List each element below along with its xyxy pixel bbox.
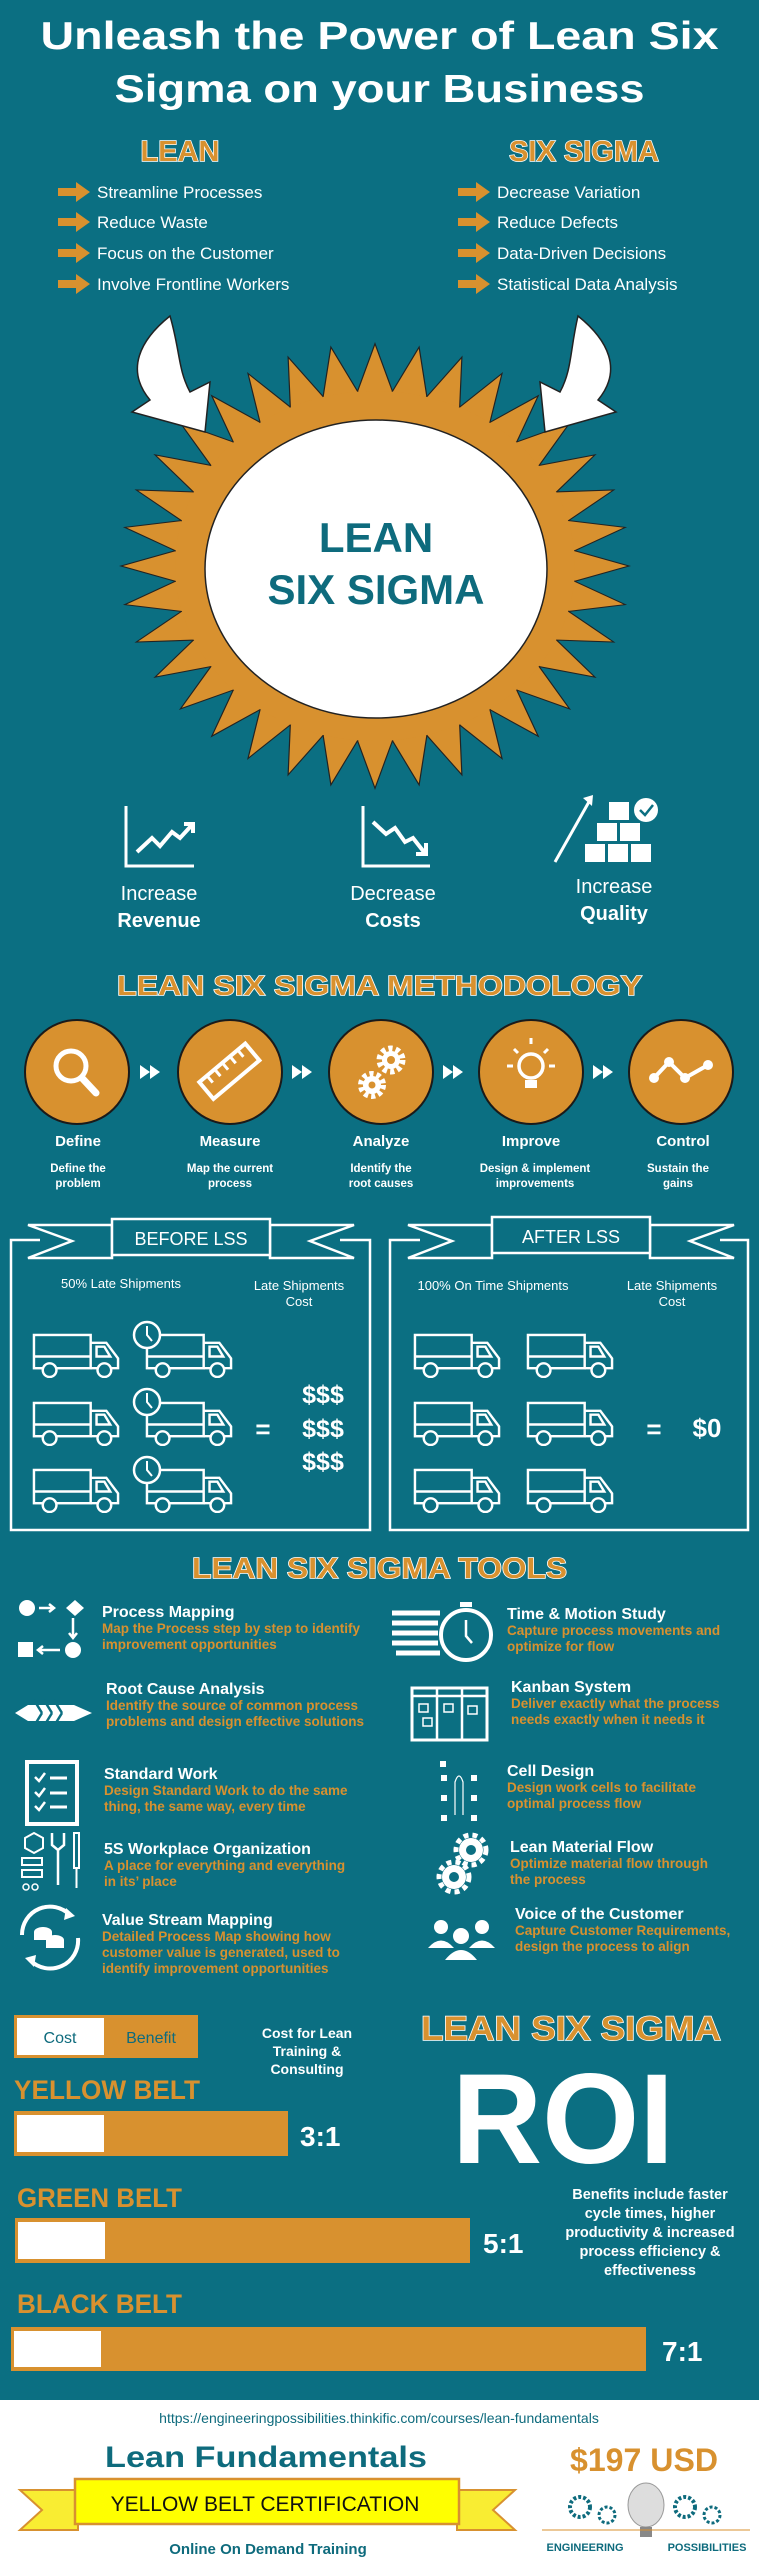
tool: voice of customer: Voice of the Customer bbox=[515, 1906, 684, 1923]
title bbox=[40, 15, 719, 111]
panel: after LSS: = bbox=[646, 1414, 662, 1444]
tool: root cause: problems and design effective solutions bbox=[106, 1714, 364, 1729]
tool: kanban: Kanban System bbox=[511, 1679, 631, 1696]
list: six sigma bullets bbox=[458, 182, 677, 294]
legend: cost / benefit: Cost bbox=[44, 2030, 77, 2047]
sunburst: lean six sigma bbox=[121, 344, 629, 788]
tool: voice of customer: design the process to align bbox=[515, 1939, 690, 1954]
tool: time and motion: Capture process movements and bbox=[507, 1623, 720, 1638]
bar: yellow belt: 3:1 bbox=[300, 2121, 340, 2152]
heading: methodology: LEAN SIX SIGMA METHODOLOGY bbox=[117, 970, 642, 1001]
tool: lean material flow: Lean Material Flow bbox=[510, 1839, 654, 1856]
title: Unleash the Power of Lean Six bbox=[40, 15, 719, 58]
heading: tools: LEAN SIX SIGMA TOOLS bbox=[192, 1553, 567, 1585]
step: improve: improvements bbox=[496, 1178, 574, 1190]
tool: root cause: Root Cause Analysis bbox=[106, 1681, 265, 1698]
panel: before LSS: Cost bbox=[286, 1294, 313, 1309]
tool: process mapping: Process Mapping bbox=[102, 1604, 234, 1621]
ribbon: before LSS: BEFORE LSS bbox=[134, 1229, 248, 1249]
bar: green belt: 5:1 bbox=[483, 2228, 523, 2259]
label: increase quality: Quality bbox=[580, 903, 649, 925]
step: measure bbox=[178, 1020, 282, 1190]
tool: standard work bbox=[27, 1762, 348, 1824]
tool: voice of customer: Capture Customer Requirements, bbox=[515, 1923, 730, 1938]
arrow: left curved bbox=[132, 316, 210, 432]
sunburst: lean six sigma: LEAN bbox=[319, 514, 433, 561]
step: define: Define bbox=[55, 1133, 101, 1150]
tool: cell design: Cell Design bbox=[507, 1763, 594, 1780]
tool: kanban: Deliver exactly what the process bbox=[511, 1696, 720, 1711]
tool: lean material flow: Optimize material flow through bbox=[510, 1856, 708, 1871]
arrow bbox=[443, 1065, 463, 1079]
tool: value stream mapping: identify improvement opportunities bbox=[102, 1961, 329, 1976]
arrow bbox=[292, 1065, 312, 1079]
label: decrease costs bbox=[350, 883, 436, 932]
icon: quality boxes bbox=[555, 795, 658, 862]
list: six sigma bullets: Statistical Data Analysis bbox=[497, 275, 677, 294]
step: control: Control bbox=[656, 1133, 710, 1150]
panel: after LSS: Late Shipments bbox=[627, 1278, 718, 1293]
bar: black belt: 7:1 bbox=[662, 2336, 702, 2367]
panel: before LSS bbox=[11, 1219, 370, 1530]
panel: after LSS bbox=[390, 1217, 748, 1530]
arrow: right curved bbox=[540, 316, 616, 432]
heading: SIX SIGMA: SIX SIGMA bbox=[509, 136, 659, 168]
step: control: gains bbox=[663, 1178, 693, 1190]
text: benefits: cycle times, higher bbox=[585, 2206, 716, 2222]
bar: green belt: GREEN BELT bbox=[17, 2183, 182, 2213]
label: decrease costs: Costs bbox=[365, 910, 421, 932]
panel: before LSS: $$$ bbox=[302, 1448, 344, 1476]
footer panel bbox=[0, 2400, 759, 2560]
logo: engineering possibilities: POSSIBILITIES bbox=[668, 2542, 746, 2554]
step: improve bbox=[479, 1020, 590, 1190]
tool: 5S: 5S Workplace Organization bbox=[104, 1841, 311, 1858]
legend: cost / benefit: Benefit bbox=[126, 2030, 176, 2047]
tool: root cause bbox=[15, 1681, 364, 1729]
tool: voice of customer bbox=[428, 1906, 730, 1960]
panel: before LSS: 50% Late Shipments bbox=[61, 1276, 181, 1291]
tool: cell design: Design work cells to facilitate bbox=[507, 1780, 697, 1795]
list: lean bullets: Focus on the Customer bbox=[97, 244, 274, 263]
icon: revenue chart bbox=[126, 806, 194, 866]
step: analyze bbox=[329, 1020, 433, 1190]
tool: kanban bbox=[412, 1679, 720, 1740]
ribbon: yellow belt certification: YELLOW BELT CERTIFICATION bbox=[111, 2493, 419, 2516]
tool: cell design bbox=[440, 1761, 697, 1821]
tool: value stream mapping: Detailed Process Map showing how bbox=[102, 1929, 331, 1944]
bar: black belt: BLACK BELT bbox=[17, 2289, 182, 2319]
step: analyze: Identify the bbox=[350, 1163, 412, 1175]
heading: LEAN: LEAN bbox=[141, 136, 219, 168]
icon: costs chart bbox=[363, 806, 430, 866]
list: lean bullets: Streamline Processes bbox=[97, 183, 262, 202]
title: Sigma on your Business bbox=[114, 68, 644, 111]
step: measure: process bbox=[208, 1178, 252, 1190]
list: lean bullets: Reduce Waste bbox=[97, 213, 208, 232]
sunburst: lean six sigma: SIX SIGMA bbox=[267, 566, 485, 613]
panel: before LSS: $$$ bbox=[302, 1381, 344, 1409]
panel: before LSS: $$$ bbox=[302, 1415, 344, 1443]
ribbon: before LSS bbox=[112, 1219, 270, 1255]
label: increase quality: Increase bbox=[576, 876, 652, 898]
text: cost for lean training: Cost for Lean bbox=[262, 2025, 352, 2041]
ribbon: after LSS: AFTER LSS bbox=[522, 1227, 620, 1247]
tool: process mapping bbox=[18, 1600, 361, 1658]
text: benefits bbox=[565, 2187, 735, 2279]
list: lean bullets bbox=[58, 182, 289, 294]
ribbon: after LSS bbox=[492, 1217, 650, 1253]
step: analyze: root causes bbox=[349, 1178, 413, 1190]
step: control: Sustain the bbox=[647, 1163, 709, 1175]
tool: 5S bbox=[22, 1833, 345, 1890]
ribbon: yellow belt certification bbox=[20, 2479, 515, 2530]
heading: LSS ROI: ROI bbox=[452, 2048, 674, 2191]
heading: LSS ROI bbox=[421, 2010, 721, 2191]
tool: process mapping: improvement opportunities bbox=[102, 1637, 277, 1652]
label: increase revenue: Revenue bbox=[117, 910, 201, 932]
tool: standard work: Design Standard Work to do the same bbox=[104, 1783, 348, 1798]
label: decrease costs: Decrease bbox=[350, 883, 436, 905]
bar: yellow belt bbox=[14, 2075, 340, 2156]
arrow bbox=[140, 1065, 160, 1079]
step: measure: Map the current bbox=[187, 1163, 273, 1175]
step: define: problem bbox=[55, 1178, 101, 1190]
step: define: Define the bbox=[50, 1163, 106, 1175]
list: six sigma bullets: Decrease Variation bbox=[497, 183, 640, 202]
tool: root cause: Identify the source of common process bbox=[106, 1698, 358, 1713]
step: analyze: Analyze bbox=[353, 1133, 409, 1150]
label: increase revenue: Increase bbox=[121, 883, 197, 905]
tool: cell design: optimal process flow bbox=[507, 1796, 642, 1811]
list: lean bullets: Involve Frontline Workers bbox=[97, 275, 289, 294]
list: six sigma bullets: Reduce Defects bbox=[497, 213, 618, 232]
text: cost for lean training bbox=[262, 2025, 352, 2077]
text: online training: Online On Demand Training bbox=[169, 2541, 367, 2558]
tool: value stream mapping: Value Stream Mapping bbox=[102, 1912, 273, 1929]
tool: lean material flow: the process bbox=[510, 1872, 586, 1887]
legend: cost / benefit bbox=[14, 2015, 198, 2058]
price: $197 USD bbox=[570, 2442, 718, 2478]
panel: after LSS: Cost bbox=[659, 1294, 686, 1309]
tool: process mapping: Map the Process step by step to identify bbox=[102, 1621, 361, 1636]
step: measure: Measure bbox=[200, 1133, 260, 1150]
tool: standard work: Standard Work bbox=[104, 1766, 218, 1783]
tool: time and motion: optimize for flow bbox=[507, 1639, 615, 1654]
logo: engineering possibilities bbox=[542, 2483, 750, 2554]
step: improve: Improve bbox=[502, 1133, 560, 1150]
panel: after LSS: $0 bbox=[693, 1413, 721, 1443]
logo: engineering possibilities: ENGINEERING bbox=[546, 2542, 624, 2554]
tool: time and motion bbox=[392, 1602, 720, 1660]
step: improve: Design & implement bbox=[480, 1163, 590, 1175]
step: control bbox=[629, 1020, 733, 1190]
bar: yellow belt: YELLOW BELT bbox=[14, 2075, 200, 2105]
text: benefits: productivity & increased bbox=[565, 2225, 735, 2241]
label: increase revenue bbox=[117, 883, 201, 932]
heading: lean fundamentals: Lean Fundamentals bbox=[105, 2441, 427, 2474]
panel: before LSS: Late Shipments bbox=[254, 1278, 345, 1293]
tool: standard work: thing, the same way, every time bbox=[104, 1799, 306, 1814]
text: benefits: process efficiency & bbox=[579, 2244, 721, 2260]
dmaic steps bbox=[25, 1020, 733, 1190]
panel: before LSS: = bbox=[255, 1414, 271, 1444]
url: https://engineeringpossibilities.thinkific.com/courses/lean-fundamentals bbox=[159, 2410, 599, 2426]
arrow bbox=[593, 1065, 613, 1079]
heading: LSS ROI: LEAN SIX SIGMA bbox=[421, 2010, 721, 2048]
text: cost for lean training: Consulting bbox=[270, 2061, 344, 2077]
text: benefits: effectiveness bbox=[604, 2263, 696, 2279]
tool: 5S: in its’ place bbox=[104, 1874, 177, 1889]
bar: black belt bbox=[11, 2289, 702, 2371]
text: benefits: Benefits include faster bbox=[572, 2187, 728, 2203]
bar: green belt bbox=[15, 2183, 523, 2263]
tool: lean material flow bbox=[439, 1835, 708, 1892]
list: six sigma bullets: Data-Driven Decisions bbox=[497, 244, 666, 263]
tool: 5S: A place for everything and everything bbox=[104, 1858, 345, 1873]
panel: after LSS: 100% On Time Shipments bbox=[417, 1278, 569, 1293]
text: cost for lean training: Training & bbox=[273, 2043, 341, 2059]
tool: kanban: needs exactly when it needs it bbox=[511, 1712, 705, 1727]
label: increase quality bbox=[576, 876, 652, 925]
tool: value stream mapping: customer value is generated, used to bbox=[102, 1945, 340, 1960]
tool: time and motion: Time & Motion Study bbox=[507, 1606, 666, 1623]
tool: value stream mapping bbox=[22, 1907, 340, 1976]
step: define bbox=[25, 1020, 129, 1190]
